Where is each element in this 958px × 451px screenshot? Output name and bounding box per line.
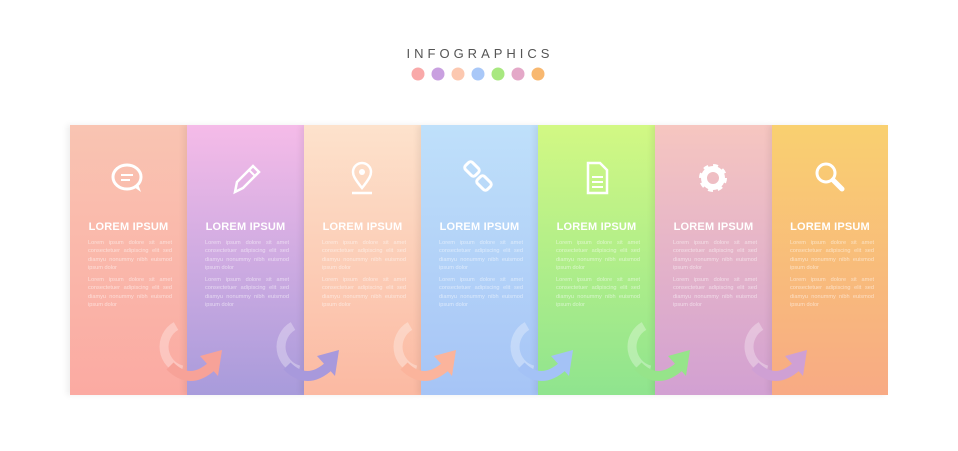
panel: 4: Lorem ipsum dolore sit amet consectetuer adipiscing elit sed diamyu nonummy nibh euismod ipsum dolor — [439, 240, 523, 271]
panel: 7: Lorem ipsum dolore sit amet consectetuer adipiscing elit sed diamyu nonummy nibh euismod ipsum dolor — [790, 277, 874, 308]
panel: 2: LOREM IPSUM — [206, 221, 285, 233]
panel: 3 — [304, 125, 421, 395]
colour dots — [412, 68, 544, 80]
icon: link — [463, 160, 493, 192]
icon: location pin — [352, 162, 372, 194]
panel: 6 — [655, 125, 772, 395]
panel: 6: Lorem ipsum dolore sit amet consectetuer adipiscing elit sed diamyu nonummy nibh euismod ipsum dolor — [673, 277, 757, 308]
panel: 5: Lorem ipsum dolore sit amet consectetuer adipiscing elit sed diamyu nonummy nibh euismod ipsum dolor — [556, 277, 640, 308]
icon: chat — [112, 164, 142, 192]
panel: 1 — [70, 125, 187, 395]
panel: 7: Lorem ipsum dolore sit amet consectetuer adipiscing elit sed diamyu nonummy nibh euismod ipsum dolor — [790, 240, 874, 271]
panel: 2: Lorem ipsum dolore sit amet consectetuer adipiscing elit sed diamyu nonummy nibh euismod ipsum dolor — [205, 240, 289, 271]
panel: 1: Lorem ipsum dolore sit amet consectetuer adipiscing elit sed diamyu nonummy nibh euismod ipsum dolor — [88, 277, 172, 308]
title: INFOGRAPHICS — [407, 46, 553, 61]
panel: 3: Lorem ipsum dolore sit amet consectetuer adipiscing elit sed diamyu nonummy nibh euismod ipsum dolor — [322, 240, 406, 271]
icon: gear — [699, 164, 727, 192]
panel: 4: Lorem ipsum dolore sit amet consectetuer adipiscing elit sed diamyu nonummy nibh euismod ipsum dolor — [439, 277, 523, 308]
panel: 4 — [421, 125, 538, 395]
panel: 2 — [187, 125, 304, 395]
panel: 6: Lorem ipsum dolore sit amet consectetuer adipiscing elit sed diamyu nonummy nibh euismod ipsum dolor — [673, 240, 757, 271]
panel: 1: LOREM IPSUM — [89, 221, 168, 233]
panel: 6: LOREM IPSUM — [674, 221, 753, 233]
panel: 5: Lorem ipsum dolore sit amet consectetuer adipiscing elit sed diamyu nonummy nibh euismod ipsum dolor — [556, 240, 640, 271]
panel: 7 — [772, 125, 888, 395]
panel: 1: Lorem ipsum dolore sit amet consectetuer adipiscing elit sed diamyu nonummy nibh euismod ipsum dolor — [88, 240, 172, 271]
panel: 4: LOREM IPSUM — [440, 221, 519, 233]
panel: 3: Lorem ipsum dolore sit amet consectetuer adipiscing elit sed diamyu nonummy nibh euismod ipsum dolor — [322, 277, 406, 308]
icon: magnifier — [816, 162, 844, 192]
icon: document — [586, 162, 608, 194]
panel: 7: LOREM IPSUM — [790, 221, 870, 233]
icon: pencil — [233, 164, 261, 194]
panel: 5: LOREM IPSUM — [557, 221, 636, 233]
panel: 3: LOREM IPSUM — [323, 221, 402, 233]
panel: 2: Lorem ipsum dolore sit amet consectetuer adipiscing elit sed diamyu nonummy nibh euismod ipsum dolor — [205, 277, 289, 308]
panel: 5 — [538, 125, 655, 395]
